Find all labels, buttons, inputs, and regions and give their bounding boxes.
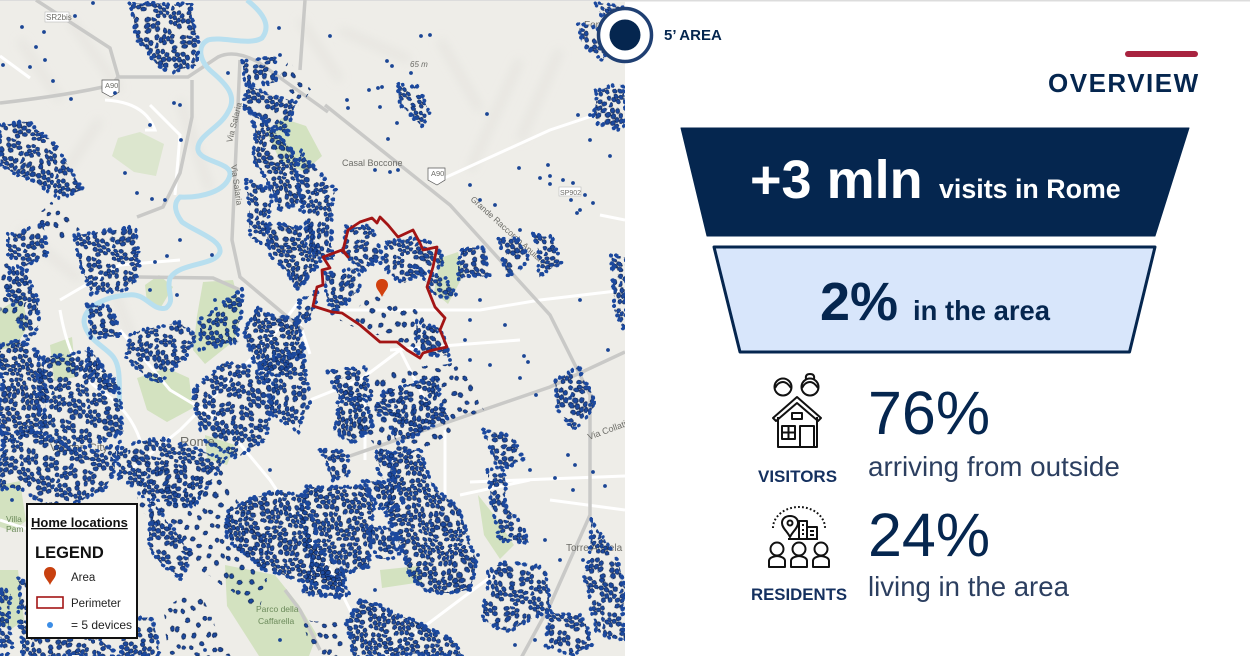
legend perimeter label: Perimeter — [71, 598, 121, 610]
stat: 76%: 76% — [868, 379, 990, 447]
area marker circle — [598, 8, 652, 62]
perimeter outline — [313, 217, 447, 358]
map labels: Via Collatina — [586, 415, 637, 442]
stat caption: living in the area: living in the area — [868, 571, 1070, 602]
legend dot swatch — [47, 622, 53, 628]
stat: 24%: 24% — [868, 501, 990, 569]
stat caption: arriving from outside: arriving from outside — [868, 451, 1120, 482]
river — [84, 0, 266, 408]
map labels: Rome — [180, 434, 215, 449]
map labels: Vatican City — [50, 442, 108, 454]
roads — [0, 56, 625, 656]
device dot clusters — [0, 4, 625, 656]
map labels: Pam — [6, 524, 23, 534]
parks — [0, 118, 514, 656]
area label: 5’ AREA — [664, 27, 722, 44]
legend devices label: = 5 devices — [71, 618, 132, 632]
legend area label: Area — [71, 572, 96, 584]
accent bar — [1125, 51, 1198, 57]
map labels: Casal Boccone — [342, 158, 403, 168]
label: residents: RESIDENTS — [751, 585, 847, 604]
map labels: A90 — [105, 81, 118, 90]
label: visitors: VISITORS — [758, 467, 837, 486]
highways — [0, 0, 625, 656]
funnel bottom: in the area: in the area — [913, 295, 1051, 326]
map labels: Torre Angela — [566, 543, 623, 554]
scattered device dots — [3, 3, 610, 650]
map labels: Via Salaria — [229, 164, 245, 206]
funnel top: visits in Rome — [681, 128, 1189, 236]
icon: residents — [769, 507, 829, 567]
funnel bottom: in the area — [714, 247, 1155, 352]
legend title: Home locations — [31, 515, 128, 530]
area pin — [376, 279, 388, 297]
heading: overview: OVERVIEW — [1048, 68, 1200, 98]
map panel: home locations in Rome — [0, 0, 637, 656]
legend pin marker — [44, 567, 56, 585]
map labels: Fon — [584, 20, 601, 31]
map labels: SR2bis — [46, 13, 72, 22]
map labels: Via Salaria — [224, 101, 244, 143]
legend heading: LEGEND — [35, 544, 104, 562]
map labels: SP902 — [560, 190, 581, 197]
map labels: Parco della — [256, 604, 299, 614]
map labels: Caffarella — [258, 616, 294, 626]
funnel top: visits in Rome: +3 mln — [750, 150, 923, 210]
funnel bottom: in the area: 2% — [820, 272, 898, 332]
legend perimeter swatch — [37, 597, 63, 608]
funnel top: visits in Rome: visits in Rome — [939, 174, 1121, 204]
legend — [27, 504, 137, 638]
map labels: Grande Raccordo Anulare — [469, 194, 549, 267]
map labels: A90 — [431, 169, 444, 178]
icon: visitors house — [773, 374, 821, 447]
map labels: Villa — [6, 514, 22, 524]
map labels — [6, 12, 637, 626]
map labels: 65 m — [410, 60, 428, 69]
